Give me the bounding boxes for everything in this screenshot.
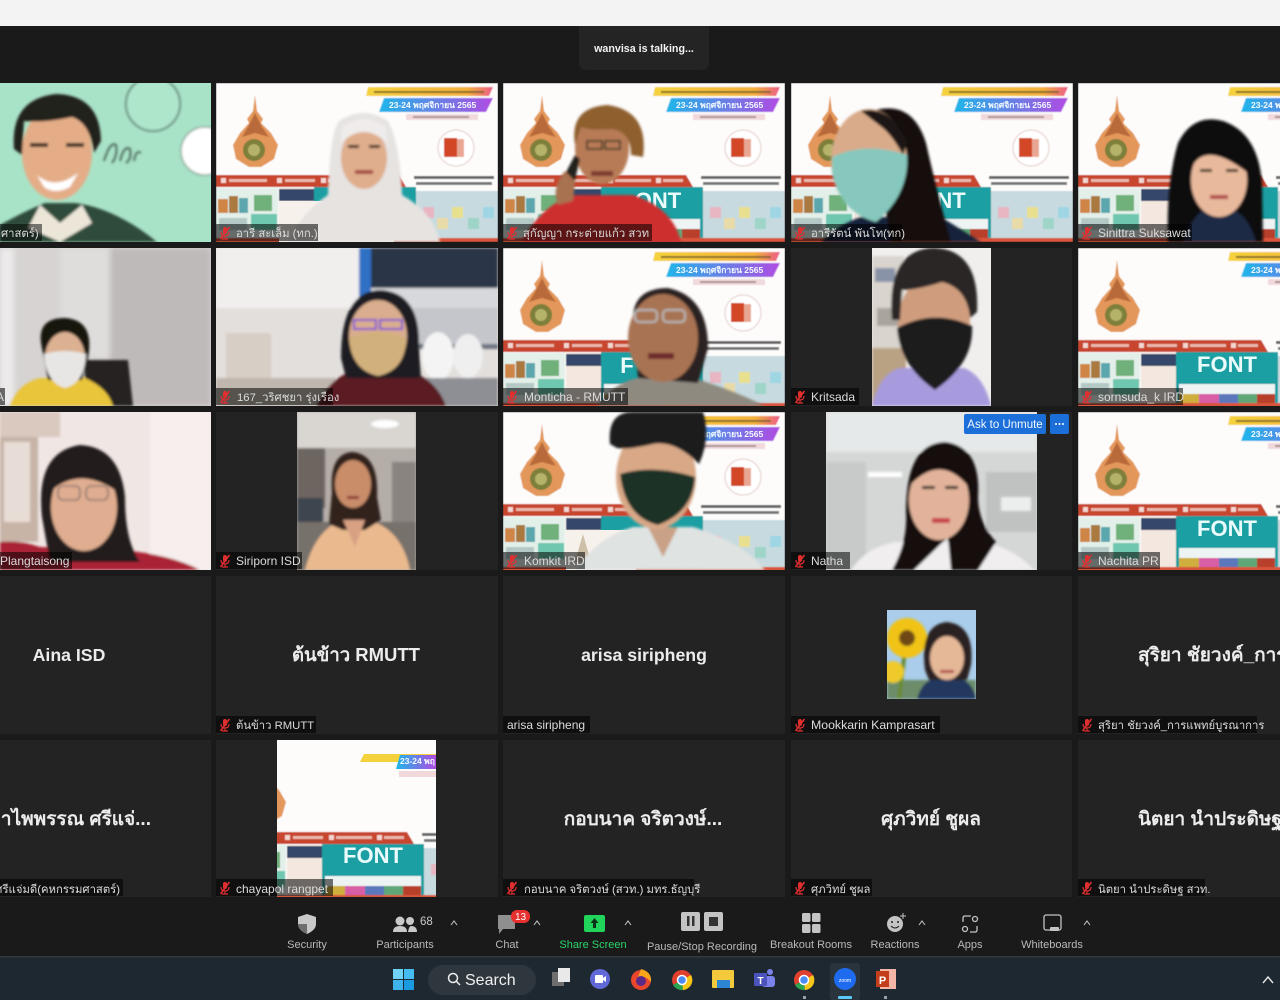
tile: woman with phone in red: ONT <box>635 188 682 213</box>
name label <box>791 552 850 569</box>
tile: arisa siripheng <box>503 576 785 734</box>
apps button <box>957 916 983 951</box>
search box <box>428 965 536 995</box>
name label <box>216 388 339 405</box>
tile: FONT slide, Nachita: FONT <box>1197 516 1257 541</box>
tile: Kobnak: กอบนาค จริตวงษ์... <box>564 808 722 830</box>
task view icon <box>552 968 570 986</box>
powerpoint icon: P <box>879 975 886 987</box>
tile: Nitaya: นิตยา นำประดิษฐ <box>1138 809 1280 832</box>
tile: woman with glasses on slide: F <box>620 353 634 378</box>
tile: woman with long black hair <box>1078 83 1280 242</box>
name label: ศาสตร์) <box>1 226 39 240</box>
chat button: 13 <box>515 912 526 923</box>
share screen button <box>559 915 631 951</box>
tile: RMUTT: ต้นข้าว RMUTT <box>292 644 421 665</box>
active speaker notice <box>579 26 709 70</box>
tile: woman with phone in red <box>503 83 785 242</box>
start button <box>393 969 414 990</box>
meeting toolbar <box>0 897 1280 957</box>
tile: woman in teal mask: NT <box>936 188 966 213</box>
tile: Paipan: าไพพรรณ ศรีแจ่... <box>1 807 151 830</box>
tile: man on mint background <box>0 77 229 242</box>
chat button: Chat <box>495 939 519 951</box>
tile: FONT slide, Nachita <box>1078 412 1280 571</box>
name label: อารี สะเล็ม (ทก.) <box>236 225 318 240</box>
name label: Komkit IRD <box>524 554 585 568</box>
tile: Kobnak <box>503 740 785 897</box>
tile: man in black mask, Kritsada <box>791 248 1072 406</box>
name label <box>791 716 940 733</box>
name label <box>1078 716 1264 733</box>
name label <box>216 716 316 733</box>
name label <box>216 224 318 241</box>
search box: Search <box>465 972 516 989</box>
tile: man in green mask on slide <box>503 412 785 571</box>
participants button <box>376 916 457 951</box>
teams icon: T <box>757 976 764 987</box>
tile: woman in teal mask: 23-24 พฤศจิกายน 2565 <box>964 100 1051 110</box>
participants button: 68 <box>420 916 433 928</box>
teams icon <box>754 969 775 987</box>
active speaker notice: wanvisa is talking... <box>593 43 694 55</box>
chrome icon <box>672 970 692 990</box>
zoom icon, active: zoom <box>839 978 851 984</box>
tile: chayapol slide: FONT <box>343 843 403 868</box>
name label: Nachita PR <box>1098 554 1159 568</box>
tile: Paipan <box>0 740 211 897</box>
name label <box>0 388 5 405</box>
browser top strip <box>0 0 1280 26</box>
security button <box>287 914 327 951</box>
name label: กอบนาค จริตวงษ์ (สวท.) มทร.ธัญบุรี <box>524 882 700 896</box>
ask to unmute button: Ask to Unmute <box>967 419 1043 431</box>
tile: woman with glasses on slide: 23-24 พฤศจิกายน 2565 <box>676 265 763 275</box>
tile: Supawit <box>791 740 1072 897</box>
tile: Suriya <box>1078 576 1280 734</box>
tile: man in green mask on slide: 23-24 พฤศจิกายน 2565 <box>676 429 763 439</box>
tile: arisa siripheng: arisa siripheng <box>581 645 707 665</box>
powerpoint icon <box>876 969 896 999</box>
tile: Siriporn <box>216 412 498 570</box>
chrome icon <box>794 970 814 999</box>
windows taskbar <box>0 956 1280 1000</box>
tile: FONT slide, sornsuda <box>1078 248 1280 407</box>
name label <box>791 224 905 241</box>
tile: chayapol slide <box>216 740 506 899</box>
name label: arisa siripheng <box>507 718 585 732</box>
name label: สุริยา ชัยวงค์_การแพทย์บูรณาการ <box>1098 718 1264 732</box>
tile: woman with phone in red: 23-24 พฤศจิกายน 2565 <box>676 100 763 110</box>
zoom icon, active <box>830 963 860 1000</box>
avatar photo <box>887 610 976 699</box>
pause and stop recording button <box>647 912 757 953</box>
tile: woman in white hijab: 23-24 พฤศจิกายน 2565 <box>389 100 476 110</box>
name label: sornsuda_k IRD <box>1098 390 1184 404</box>
tile: woman in teal mask <box>791 83 1073 242</box>
name label: นิตยา นำประดิษฐ สวท. <box>1098 883 1211 896</box>
apps button: Apps <box>957 939 983 951</box>
name label: Sinittra Suksawat <box>1098 226 1191 240</box>
name label <box>791 879 872 896</box>
name label: ต้นข้าว RMUTT <box>236 719 314 732</box>
reactions button <box>871 913 925 951</box>
tile: Natha, office woman <box>791 412 1072 570</box>
name label <box>216 552 302 569</box>
tile: Nitaya <box>1078 740 1280 897</box>
tile: Aina ISD: Aina ISD <box>33 645 106 665</box>
tray chevron <box>1263 977 1273 983</box>
share screen button: Share Screen <box>559 939 627 951</box>
name label <box>1078 552 1160 569</box>
name label: Plangtaisong <box>0 554 69 568</box>
name label: Mookkarin Kamprasart <box>811 718 935 732</box>
name label: chayapol rangpet <box>236 882 329 896</box>
name label: Kritsada <box>811 390 855 404</box>
name label <box>0 879 123 896</box>
name label: อารีรัตน์ พันโท(ทก) <box>811 226 905 240</box>
name label: ศุภวิทย์ ชูผล <box>811 882 870 896</box>
name label <box>216 879 333 896</box>
tile: Supawit: ศุภวิทย์ ชูผล <box>881 808 981 831</box>
tile: FONT slide, sornsuda: FONT <box>1197 352 1257 377</box>
firefox icon <box>631 969 651 990</box>
tile: RMUTT <box>216 576 498 734</box>
whiteboards button <box>1021 915 1090 951</box>
name label <box>1078 879 1211 896</box>
tile: woman in white hijab <box>216 83 498 242</box>
name label: Monticha - RMUTT <box>524 390 626 404</box>
tile: Mookkarin with avatar <box>791 576 1072 734</box>
tile: Aina ISD <box>0 576 211 734</box>
more options button <box>1050 414 1069 434</box>
ask to unmute button <box>964 414 1046 434</box>
chat button <box>495 910 540 951</box>
name label: สุกัญญา กระต่ายแก้ว สวท <box>523 227 649 240</box>
tile: woman with glasses on slide <box>503 248 785 407</box>
name label <box>1078 224 1192 241</box>
whiteboards button: Whiteboards <box>1021 939 1083 951</box>
name label: Siriporn ISD <box>236 554 301 568</box>
name label: 167_วริศชยา รุ่งเรือง <box>237 391 339 404</box>
file explorer icon <box>712 970 734 988</box>
tile: woman with glasses in red <box>0 412 211 570</box>
name label <box>791 388 859 405</box>
tile: chayapol slide: 23-24 พฤ <box>400 756 435 766</box>
tile: woman in tan mask with shelves <box>216 248 498 406</box>
participants button: Participants <box>376 939 434 951</box>
tile: woman in yellow at desk <box>0 248 211 406</box>
breakout rooms button: Breakout Rooms <box>770 939 852 951</box>
name label <box>0 224 42 241</box>
name label <box>503 224 652 241</box>
reactions button: Reactions <box>871 939 920 951</box>
name label <box>503 879 700 896</box>
name label: Natha <box>811 554 843 568</box>
name label <box>503 552 585 569</box>
name label <box>1078 388 1184 405</box>
security button: Security <box>287 939 327 951</box>
pause and stop recording button: Pause/Stop Recording <box>647 941 757 953</box>
name label <box>503 388 628 405</box>
breakout rooms button <box>770 913 852 951</box>
meet icon <box>590 969 610 989</box>
